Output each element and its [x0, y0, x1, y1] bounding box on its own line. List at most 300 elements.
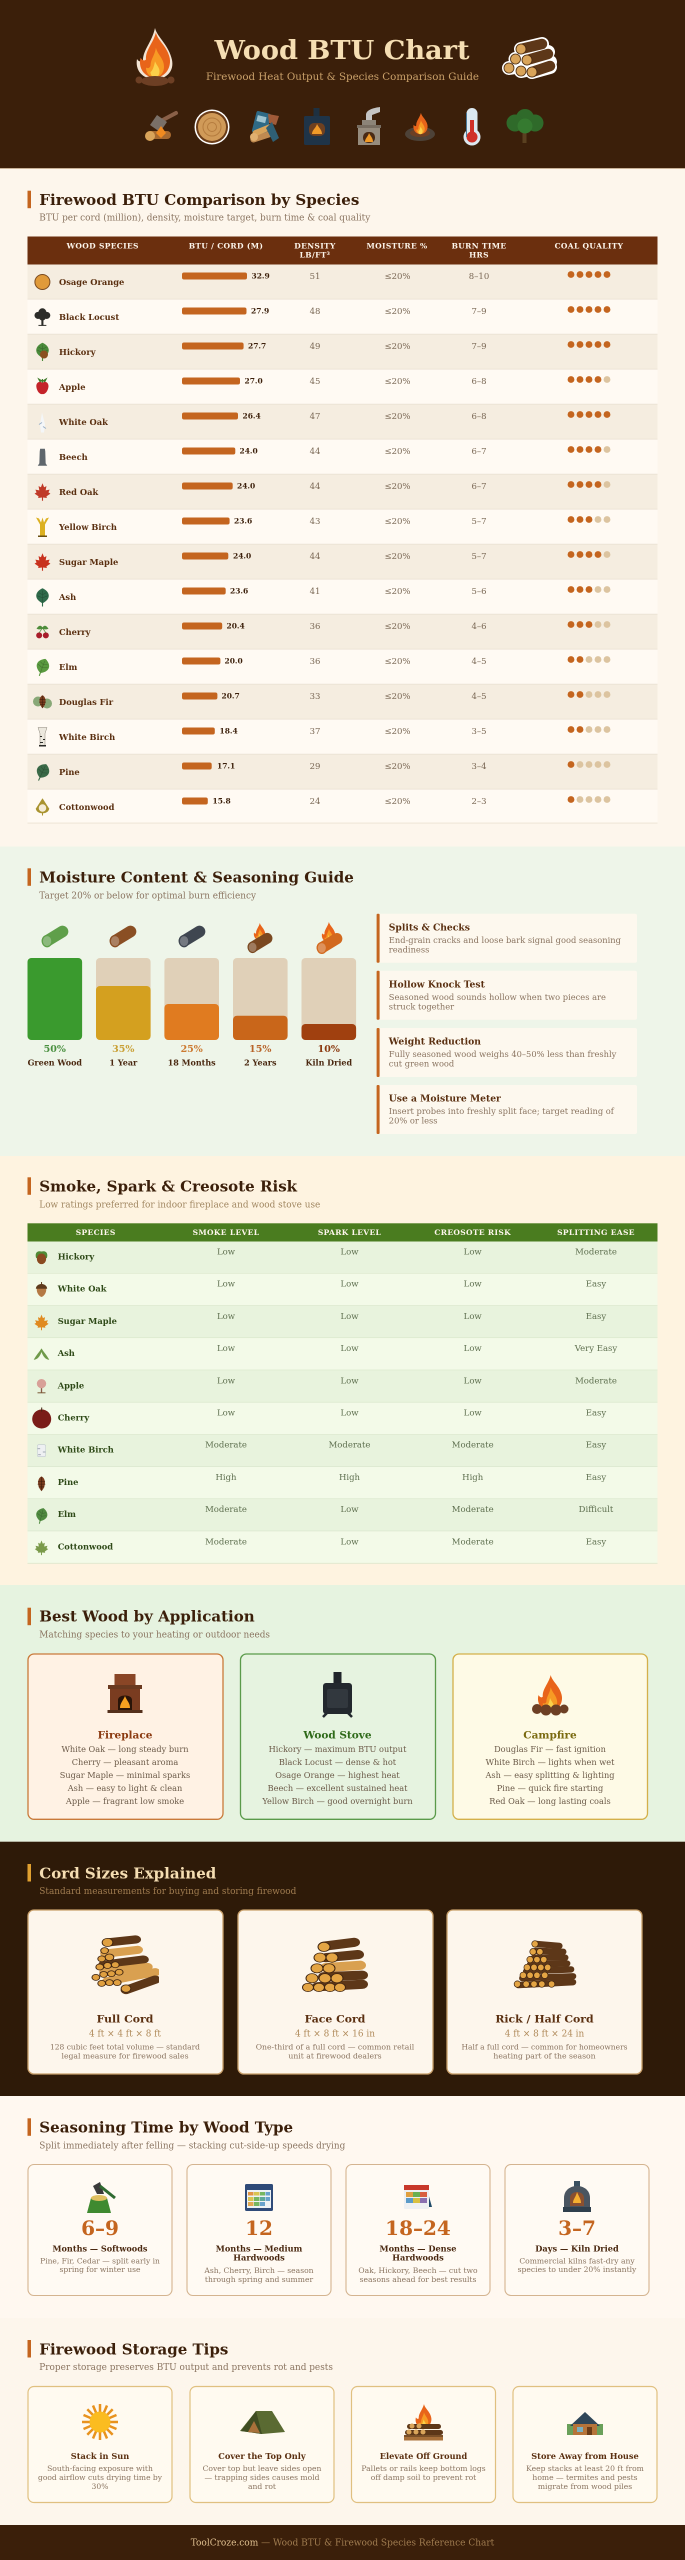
card: fireplace: Cherry — pleasant aroma [72, 1757, 178, 1767]
card: stack in sun: South-facing exposure with [47, 2464, 153, 2473]
heading: application: Best Wood by Application [39, 1608, 255, 1626]
row: Cherry: Cherry [59, 627, 92, 637]
table header: BTU / CORD (M) [189, 242, 263, 251]
moisture bar: 35%: 35% [112, 1044, 134, 1055]
icon: log stack [504, 44, 550, 77]
row: Black Locust: 48 [310, 307, 320, 317]
row: Cottonwood: Cottonwood [59, 802, 115, 812]
icon: logs on pallet with fire [404, 2404, 443, 2440]
row: Beech: Beech [59, 452, 88, 462]
card: wood stove: Beech — excellent sustained heat [268, 1783, 408, 1793]
row: Cottonwood: 24 [310, 797, 320, 807]
card: elevate [352, 2386, 496, 2502]
card: kiln dried: Commercial kilns fast-dry any [519, 2256, 635, 2265]
tip: hollow knock: Hollow Knock Test [389, 980, 486, 991]
card: wood stove: Black Locust — dense & hot [279, 1757, 397, 1767]
icon: house [567, 2412, 603, 2435]
row: Apple: Apple [58, 382, 85, 392]
row: White Oak: Low [217, 1280, 236, 1290]
moisture bar: 25% [164, 958, 219, 1067]
row: Cherry: 36 [310, 622, 320, 632]
icon: kiln [563, 2181, 591, 2212]
card: medium hardwoods: Months — Medium [216, 2244, 302, 2254]
icon: burning log [248, 923, 267, 953]
tip: weight reduction: Fully seasoned wood weighs 40–50% less than freshly [389, 1049, 617, 1059]
icon: wood stove [323, 1672, 352, 1717]
card: wood stove: Yellow Birch — good overnight burn [261, 1796, 413, 1806]
row: Pine: High [339, 1473, 361, 1483]
row: Apple: Low [340, 1376, 359, 1386]
row: White Oak: 26.4 [242, 412, 261, 420]
table header: LB/FT³ [300, 251, 330, 260]
moisture bar: 10% [302, 958, 356, 1067]
row: Cherry: ≤20% [384, 622, 411, 632]
row: Apple: Moderate [575, 1376, 617, 1386]
card: softwoods: 6–9 [81, 2216, 119, 2240]
row: Osage Orange [28, 264, 658, 300]
row: Sugar Maple [28, 1306, 658, 1338]
row: Beech: 6–7 [471, 447, 487, 457]
card: kiln dried [505, 2164, 649, 2296]
card: dense hardwoods: Months — Dense [380, 2244, 457, 2254]
row: Sugar Maple: Low [340, 1312, 359, 1322]
card: dense hardwoods: seasons ahead for best results [360, 2275, 476, 2284]
card: kiln dried: Days — Kiln Dried [535, 2244, 619, 2254]
row: Osage Orange: 32.9 [252, 272, 270, 280]
row: Osage Orange: Osage Orange [59, 277, 124, 287]
row: Cherry: Easy [586, 1408, 606, 1418]
tip: splits and checks [377, 914, 637, 963]
row: White Birch: Moderate [205, 1441, 247, 1451]
tip: weight reduction [377, 1028, 637, 1077]
row: White Birch: White Birch [57, 1445, 114, 1455]
card: rick half cord: Half a full cord — common for homeowners [462, 2042, 628, 2051]
row: Pine: 17.1 [217, 762, 235, 770]
table header: SPECIES [76, 1228, 116, 1237]
heading: moisture: Moisture Content & Seasoning Guide [39, 869, 354, 887]
row: Pine: High [215, 1473, 237, 1483]
table header: WOOD SPECIES [66, 242, 139, 251]
moisture bar: 15%: 15% [249, 1044, 271, 1055]
row: White Oak: Low [464, 1280, 482, 1290]
table header: SPARK LEVEL [318, 1228, 382, 1237]
card: campfire: Red Oak — long lasting coals [489, 1796, 611, 1806]
row: Cottonwood: 2–3 [471, 797, 487, 807]
row: White Birch: 18.4 [220, 726, 238, 736]
row: Ash: Low [464, 1344, 482, 1354]
moisture bar: 35%: 1 Year [109, 1057, 138, 1067]
card: cover top: — trapping sides causes mold [205, 2473, 320, 2482]
card: full cord: 4 ft × 4 ft × 8 ft [89, 2030, 161, 2040]
icon: axe and logs [145, 113, 176, 141]
moisture bar: 50% [28, 958, 82, 1067]
icon: fire pit [405, 113, 435, 141]
row: White Birch: Moderate [452, 1441, 494, 1451]
moisture bar: 10%: 10% [318, 1044, 340, 1055]
row: Cottonwood: 15.8 [212, 796, 231, 806]
row: Apple [28, 370, 658, 405]
row: White Oak: Low [340, 1280, 359, 1290]
row: Yellow Birch: 43 [310, 517, 320, 527]
row: Ash: Low [340, 1344, 359, 1354]
header banner [0, 0, 685, 169]
row: Cottonwood: Moderate [452, 1537, 494, 1547]
row: Douglas Fir: 4–5 [471, 692, 487, 702]
row: Pine: ≤20% [384, 762, 411, 772]
card: campfire: Pine — quick fire starting [497, 1783, 603, 1793]
card: medium hardwoods [187, 2164, 331, 2296]
card: wood stove [240, 1654, 436, 1819]
table header: BURN TIME [452, 242, 506, 251]
panel: seasoning time [0, 2096, 685, 2318]
row: Cherry: Low [340, 1408, 359, 1418]
row: Cottonwood: Low [340, 1537, 359, 1547]
card: cover top: Cover the Top Only [218, 2452, 307, 2462]
icon: campfire flame [136, 28, 174, 86]
icon: calendar [245, 2184, 273, 2211]
tip: hollow knock: Seasoned wood sounds hollow when two pieces are [389, 992, 606, 1002]
row: Ash: Low [217, 1344, 236, 1354]
table header: HRS [469, 251, 489, 260]
row: Beech: ≤20% [384, 447, 411, 457]
icon: campfire [532, 1675, 568, 1716]
icon: rick pile [514, 1941, 573, 1987]
icon: kiln log [317, 922, 337, 954]
row: Red Oak: Red Oak [59, 487, 98, 497]
row: Pine: 3–4 [471, 762, 487, 772]
icon: moisture meter and logs [250, 111, 279, 143]
card: campfire [453, 1654, 648, 1819]
panel: BTU comparison [28, 191, 658, 824]
panel: smoke spark creosote [0, 1156, 685, 1585]
row: Cottonwood: ≤20% [384, 797, 411, 807]
footer [0, 2525, 685, 2560]
card: fireplace: Apple — fragrant low smoke [65, 1796, 184, 1806]
row: Apple: 45 [310, 377, 320, 387]
row: Ash: Very Easy [574, 1344, 617, 1354]
card: kiln dried: 3–7 [558, 2216, 596, 2240]
row: Douglas Fir [28, 684, 658, 720]
row: Yellow Birch [28, 510, 658, 545]
card: kiln dried: species to under 20% instantly [518, 2265, 637, 2274]
row: Red Oak: 24.0 [237, 482, 255, 490]
row: Hickory: Hickory [58, 1252, 95, 1262]
tip: moisture meter: Insert probes into freshly split face; target reading of [389, 1106, 615, 1116]
row: Ash: ≤20% [384, 587, 411, 597]
row: Hickory: Moderate [575, 1248, 617, 1258]
moisture bar: 15%: 2 Years [244, 1057, 277, 1067]
row: Elm: 36 [310, 657, 320, 667]
row: White Oak [28, 1274, 658, 1306]
row: Elm [28, 1499, 658, 1531]
card: fireplace: Fireplace [98, 1729, 153, 1741]
row: Elm: Moderate [205, 1505, 247, 1515]
row: Cottonwood: Cottonwood [58, 1541, 113, 1551]
row: Pine [28, 754, 658, 790]
card: full cord: 128 cubic feet total volume — standard [50, 2042, 200, 2051]
subheading: BTU per cord (million), density, moisture target, burn time & coal quality [39, 213, 371, 224]
card: elevate: Pallets or rails keep bottom logs [361, 2464, 486, 2473]
row: Sugar Maple: 5–7 [471, 552, 487, 562]
card: campfire: Campfire [523, 1729, 577, 1741]
tip: weight reduction: cut green wood [389, 1058, 455, 1068]
card: medium hardwoods: 12 [245, 2216, 273, 2240]
row: Sugar Maple: Easy [586, 1312, 606, 1322]
row: Yellow Birch: 23.6 [234, 516, 252, 526]
icon: wood round [194, 110, 230, 144]
icon: fireplace [108, 1674, 142, 1713]
card: wood stove: Wood Stove [302, 1729, 372, 1741]
icon: brown log [110, 932, 130, 947]
row: Yellow Birch: 5–7 [471, 517, 487, 527]
row: White Birch [28, 720, 658, 755]
row: Elm: Difficult [579, 1505, 614, 1515]
card: store away: home — termites and pests [532, 2473, 638, 2482]
icon: face cord pile [302, 1942, 362, 1992]
row: Hickory: 7–9 [471, 342, 487, 352]
row: Sugar Maple: Sugar Maple [58, 1316, 117, 1326]
footer: ToolCroze.com — Wood BTU & Firewood Species Reference Chart [191, 2539, 495, 2549]
card: dense hardwoods: Hardwoods [392, 2254, 444, 2264]
subheading: Target 20% or below for optimal burn efficiency [39, 891, 257, 901]
card: rick half cord [447, 1910, 642, 2074]
tip: splits and checks: Splits & Checks [389, 923, 470, 934]
icon: wood stove [304, 108, 330, 145]
row: Black Locust: 27.9 [251, 306, 269, 316]
card: face cord: 4 ft × 8 ft × 16 in [295, 2030, 375, 2040]
card: store away: Store Away from House [531, 2452, 639, 2462]
tip: moisture meter [377, 1085, 637, 1134]
moisture bar: 35% [96, 958, 151, 1067]
title: Wood BTU Chart [213, 36, 470, 66]
tip: hollow knock: struck together [389, 1001, 454, 1011]
card: fireplace: White Oak — long steady burn [61, 1744, 189, 1754]
row: White Oak: Easy [586, 1280, 606, 1290]
row: Ash: 41 [310, 587, 320, 597]
card: wood stove: Osage Orange — highest heat [275, 1770, 400, 1780]
row: Elm: Elm [59, 662, 77, 672]
icon: stone chimney [357, 107, 381, 145]
icon: desk calendar [404, 2185, 432, 2209]
row: Cottonwood: Moderate [205, 1537, 247, 1547]
row: Cherry: 4–6 [471, 622, 487, 632]
card: fireplace [28, 1654, 223, 1819]
heading: cord sizes: Cord Sizes Explained [39, 1864, 217, 1882]
row: Red Oak: 44 [310, 482, 320, 492]
panel: cord sizes [0, 1842, 685, 2096]
card: rick half cord: 4 ft × 8 ft × 24 in [505, 2030, 584, 2040]
card: cover top [190, 2386, 334, 2502]
row: Pine: Pine [59, 767, 80, 777]
row: Sugar Maple: Low [464, 1312, 482, 1322]
row: Ash [28, 580, 658, 615]
row: Sugar Maple: Low [217, 1312, 236, 1322]
card: face cord: unit at firewood dealers [288, 2051, 382, 2060]
card: rick half cord: Rick / Half Cord [495, 2014, 594, 2026]
subheading: Low ratings preferred for indoor fireplace and wood stove use [39, 1200, 320, 1210]
row: Cherry [28, 614, 658, 650]
row: Red Oak [28, 474, 658, 510]
row: Hickory [28, 334, 658, 370]
icon: thermometer [464, 108, 480, 146]
tip: moisture meter: Use a Moisture Meter [389, 1094, 501, 1105]
row: Ash: Ash [57, 1348, 75, 1358]
tip: moisture meter: 20% or less [389, 1115, 438, 1125]
row: Elm [28, 650, 658, 685]
tip: splits and checks: End-grain cracks and loose bark signal good seasoning [389, 935, 622, 945]
card: full cord [28, 1910, 223, 2074]
row: Ash [28, 1338, 658, 1370]
card: cover top: and rot [248, 2482, 276, 2491]
icon: green tree [506, 109, 544, 143]
row: Hickory: Low [464, 1248, 482, 1258]
panel: storage tips [0, 2318, 685, 2525]
card: dense hardwoods: Oak, Hickory, Beech — cut two [358, 2266, 478, 2275]
row: Hickory: Low [217, 1248, 236, 1258]
row: Black Locust [28, 300, 658, 335]
heading: BTU comparison: Firewood BTU Comparison by Species [39, 191, 359, 209]
card: fireplace: Sugar Maple — minimal sparks [60, 1770, 190, 1780]
moisture bar: 50%: Green Wood [28, 1057, 82, 1067]
card: cover top: Cover top but leave sides open [203, 2464, 321, 2473]
card: face cord: One-third of a full cord — common retail [256, 2042, 415, 2051]
table header: MOISTURE % [366, 242, 428, 251]
row: Osage Orange: ≤20% [384, 272, 411, 282]
row: Black Locust: Black Locust [59, 312, 119, 322]
card: medium hardwoods: Hardwoods [233, 2254, 285, 2264]
tip: splits and checks: readiness [389, 944, 429, 954]
card: campfire: White Birch — lights when wet [486, 1757, 615, 1767]
row: Cherry: Low [217, 1408, 236, 1418]
subtitle: Firewood Heat Output & Species Comparison Guide [206, 72, 479, 83]
row: White Oak: 6–8 [471, 412, 487, 422]
row: Sugar Maple: Sugar Maple [59, 557, 118, 567]
card: store away: migrate from wood piles [538, 2482, 632, 2491]
table header: DENSITY [294, 242, 336, 251]
row: Beech: 44 [310, 447, 320, 457]
row: Cherry: 20.4 [226, 622, 245, 630]
row: Hickory: 49 [310, 342, 320, 352]
row: Apple: Low [464, 1376, 482, 1386]
row: Ash: Ash [58, 592, 76, 602]
heading: seasoning: Seasoning Time by Wood Type [39, 2119, 293, 2137]
row: Black Locust: ≤20% [384, 307, 411, 317]
card: full cord: legal measure for firewood sales [61, 2051, 189, 2060]
card: face cord: Face Cord [305, 2014, 366, 2026]
table header: SPLITTING EASE [557, 1228, 635, 1237]
row: Elm: Moderate [452, 1505, 494, 1515]
card: face cord [238, 1910, 433, 2074]
card: elevate: Elevate Off Ground [380, 2452, 467, 2462]
row: Yellow Birch: ≤20% [384, 517, 411, 527]
moisture bar: 25%: 18 Months [168, 1057, 216, 1067]
card: softwoods: Months — Softwoods [52, 2244, 148, 2254]
row: Cherry [28, 1402, 658, 1435]
row: Hickory: ≤20% [384, 342, 411, 352]
row: Pine: High [462, 1473, 484, 1483]
table header: CREOSOTE RISK [434, 1228, 511, 1237]
row: Douglas Fir: Douglas Fir [59, 697, 114, 707]
row: Apple: 6–8 [471, 377, 487, 387]
card: store away: Keep stacks at least 20 ft from [526, 2464, 644, 2473]
row: Hickory: Hickory [59, 347, 97, 357]
row: Sugar Maple: 24.0 [233, 552, 251, 560]
row: Cottonwood [28, 790, 658, 824]
row: White Birch: 3–5 [471, 727, 487, 737]
panel: moisture content [0, 846, 685, 1156]
card: softwoods [28, 2164, 172, 2296]
row: White Oak: 47 [310, 412, 320, 422]
table header [28, 236, 658, 265]
row: Beech [28, 440, 658, 475]
row: Pine: 29 [310, 762, 320, 772]
row: Apple: ≤20% [384, 377, 411, 387]
card: dense hardwoods [346, 2164, 490, 2296]
row: Cherry: Cherry [58, 1412, 90, 1422]
row: Pine [28, 1467, 658, 1499]
moisture bar: 15% [233, 958, 288, 1067]
row: Apple: Low [217, 1376, 236, 1386]
subheading: Split immediately after felling — stacking cut-side-up speeds drying [39, 2141, 346, 2151]
icon: green log [42, 932, 62, 947]
card: dense hardwoods: 18–24 [385, 2216, 451, 2240]
icon: full cord pile [92, 1938, 155, 1992]
card: stack in sun: Stack in Sun [71, 2452, 130, 2462]
row: Douglas Fir: ≤20% [384, 692, 411, 702]
heading: smoke: Smoke, Spark & Creosote Risk [39, 1178, 298, 1196]
row: Hickory [28, 1242, 658, 1274]
row: White Birch: Moderate [329, 1441, 370, 1451]
card: medium hardwoods: through spring and summer [205, 2275, 313, 2284]
card: stack in sun: 30% [92, 2482, 108, 2491]
subheading: Proper storage preserves BTU output and prevents rot and pests [39, 2363, 333, 2373]
card: softwoods: Pine, Fir, Cedar — split early in [40, 2256, 160, 2265]
row: Osage Orange: 51 [310, 272, 320, 282]
table header [28, 1223, 658, 1242]
row: Sugar Maple: ≤20% [384, 552, 411, 562]
row: Hickory: 27.7 [248, 342, 266, 350]
card: fireplace: Ash — easy to light & clean [67, 1783, 183, 1793]
row: White Birch: White Birch [58, 732, 115, 742]
table header: SMOKE LEVEL [193, 1228, 260, 1237]
row: Sugar Maple [28, 544, 658, 580]
row: Cottonwood: Easy [586, 1537, 606, 1547]
row: Sugar Maple: 44 [310, 552, 320, 562]
row: Cottonwood [28, 1531, 658, 1564]
row: White Birch [28, 1435, 658, 1467]
row: Hickory: Low [340, 1248, 359, 1258]
icon: tent [240, 2411, 285, 2434]
row: White Birch: 37 [310, 727, 320, 737]
subheading: Matching species to your heating or outdoor needs [39, 1630, 270, 1640]
row: Elm: 4–5 [471, 657, 487, 667]
icon: sun [82, 2404, 118, 2440]
row: White Oak: ≤20% [384, 412, 411, 422]
row: White Birch: ≤20% [384, 727, 411, 737]
row: Red Oak: ≤20% [384, 482, 411, 492]
row: Apple: Apple [57, 1380, 84, 1390]
row: Ash: 23.6 [230, 586, 248, 596]
moisture bar: 10%: Kiln Dried [306, 1057, 352, 1067]
row: Elm: ≤20% [384, 657, 411, 667]
row: Douglas Fir: 33 [310, 692, 320, 702]
subheading: Standard measurements for buying and storing firewood [39, 1887, 297, 1897]
row: White Oak [28, 404, 658, 440]
table header: COAL QUALITY [555, 242, 624, 251]
card: softwoods: spring for winter use [59, 2265, 141, 2274]
card: campfire: Ash — easy splitting & lighting [484, 1770, 614, 1780]
heading: storage: Firewood Storage Tips [39, 2340, 228, 2358]
